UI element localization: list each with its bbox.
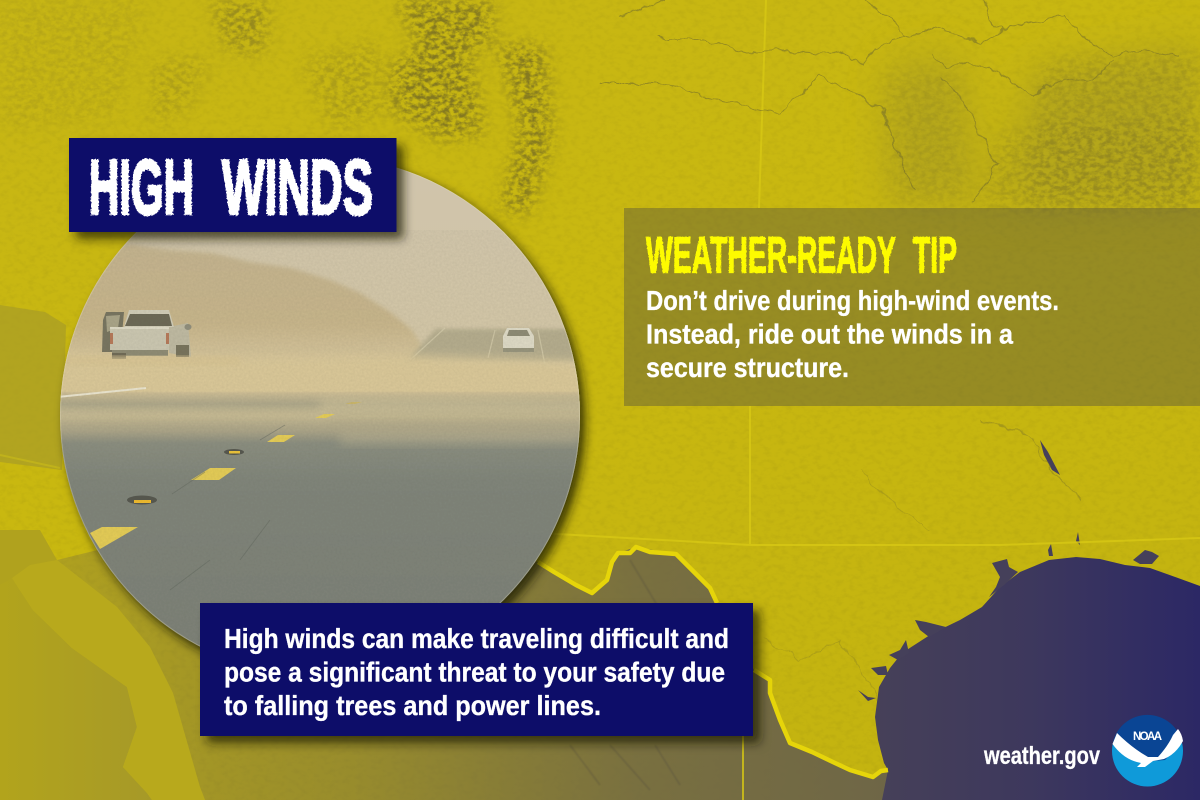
photo: truck on dusty highway in a circle (58, 167, 592, 658)
tip body text: Don’t drive during high-wind events. (646, 285, 1059, 316)
tip body text: Instead, ride out the winds in a (646, 318, 1014, 350)
map: coastal bays (858, 440, 1159, 701)
photo: dust cloud (60, 352, 580, 397)
panel: high winds description (200, 603, 753, 736)
map: Rio Grande border (538, 547, 888, 777)
title text (89, 143, 373, 231)
photo: asphalt cracks (170, 425, 285, 590)
icon: NOAA logo (1112, 715, 1183, 786)
tip body text (646, 285, 1059, 383)
map: mountain ridges (2, 0, 1200, 221)
photo: yellow lane dashes (90, 402, 362, 549)
photo: white pickup truck, distant (503, 328, 534, 352)
photo: hillside (64, 244, 420, 370)
description text: High winds can make traveling difficult and (224, 623, 729, 654)
photo: distant road (406, 329, 580, 362)
description text (224, 623, 729, 721)
photo: ground dust over truck wheels (112, 355, 191, 359)
title text: HIGH (89, 143, 194, 231)
title banner: High Winds (69, 138, 396, 232)
description text: pose a significant threat to your safety due (224, 656, 725, 688)
map: rivers (600, 0, 1178, 700)
photo: road surface (58, 392, 592, 658)
tip heading: TIP (913, 226, 957, 284)
map: Baja California (12, 560, 205, 800)
map: Pacific ocean regions (0, 305, 152, 800)
map: Gulf of Mexico (875, 557, 1200, 800)
photo: white pickup truck, left (102, 310, 192, 359)
photo: road reflectors (127, 449, 244, 504)
panel: Weather-Ready tip (624, 208, 1200, 406)
description text: to falling trees and power lines. (224, 690, 601, 721)
website label: weather.gov: weather.gov (983, 742, 1100, 770)
NOAA logo text: NOAA (1133, 731, 1162, 743)
photo: white edge line (58, 388, 146, 397)
tip heading (646, 226, 957, 284)
tip heading: WEATHER-READY (646, 226, 896, 284)
map: eastern darkening (885, 40, 1200, 208)
map: Mexico (57, 500, 888, 800)
map: Mexico ridges (570, 560, 680, 790)
tip body text: secure structure. (646, 352, 849, 383)
title text: WINDS (222, 143, 373, 231)
